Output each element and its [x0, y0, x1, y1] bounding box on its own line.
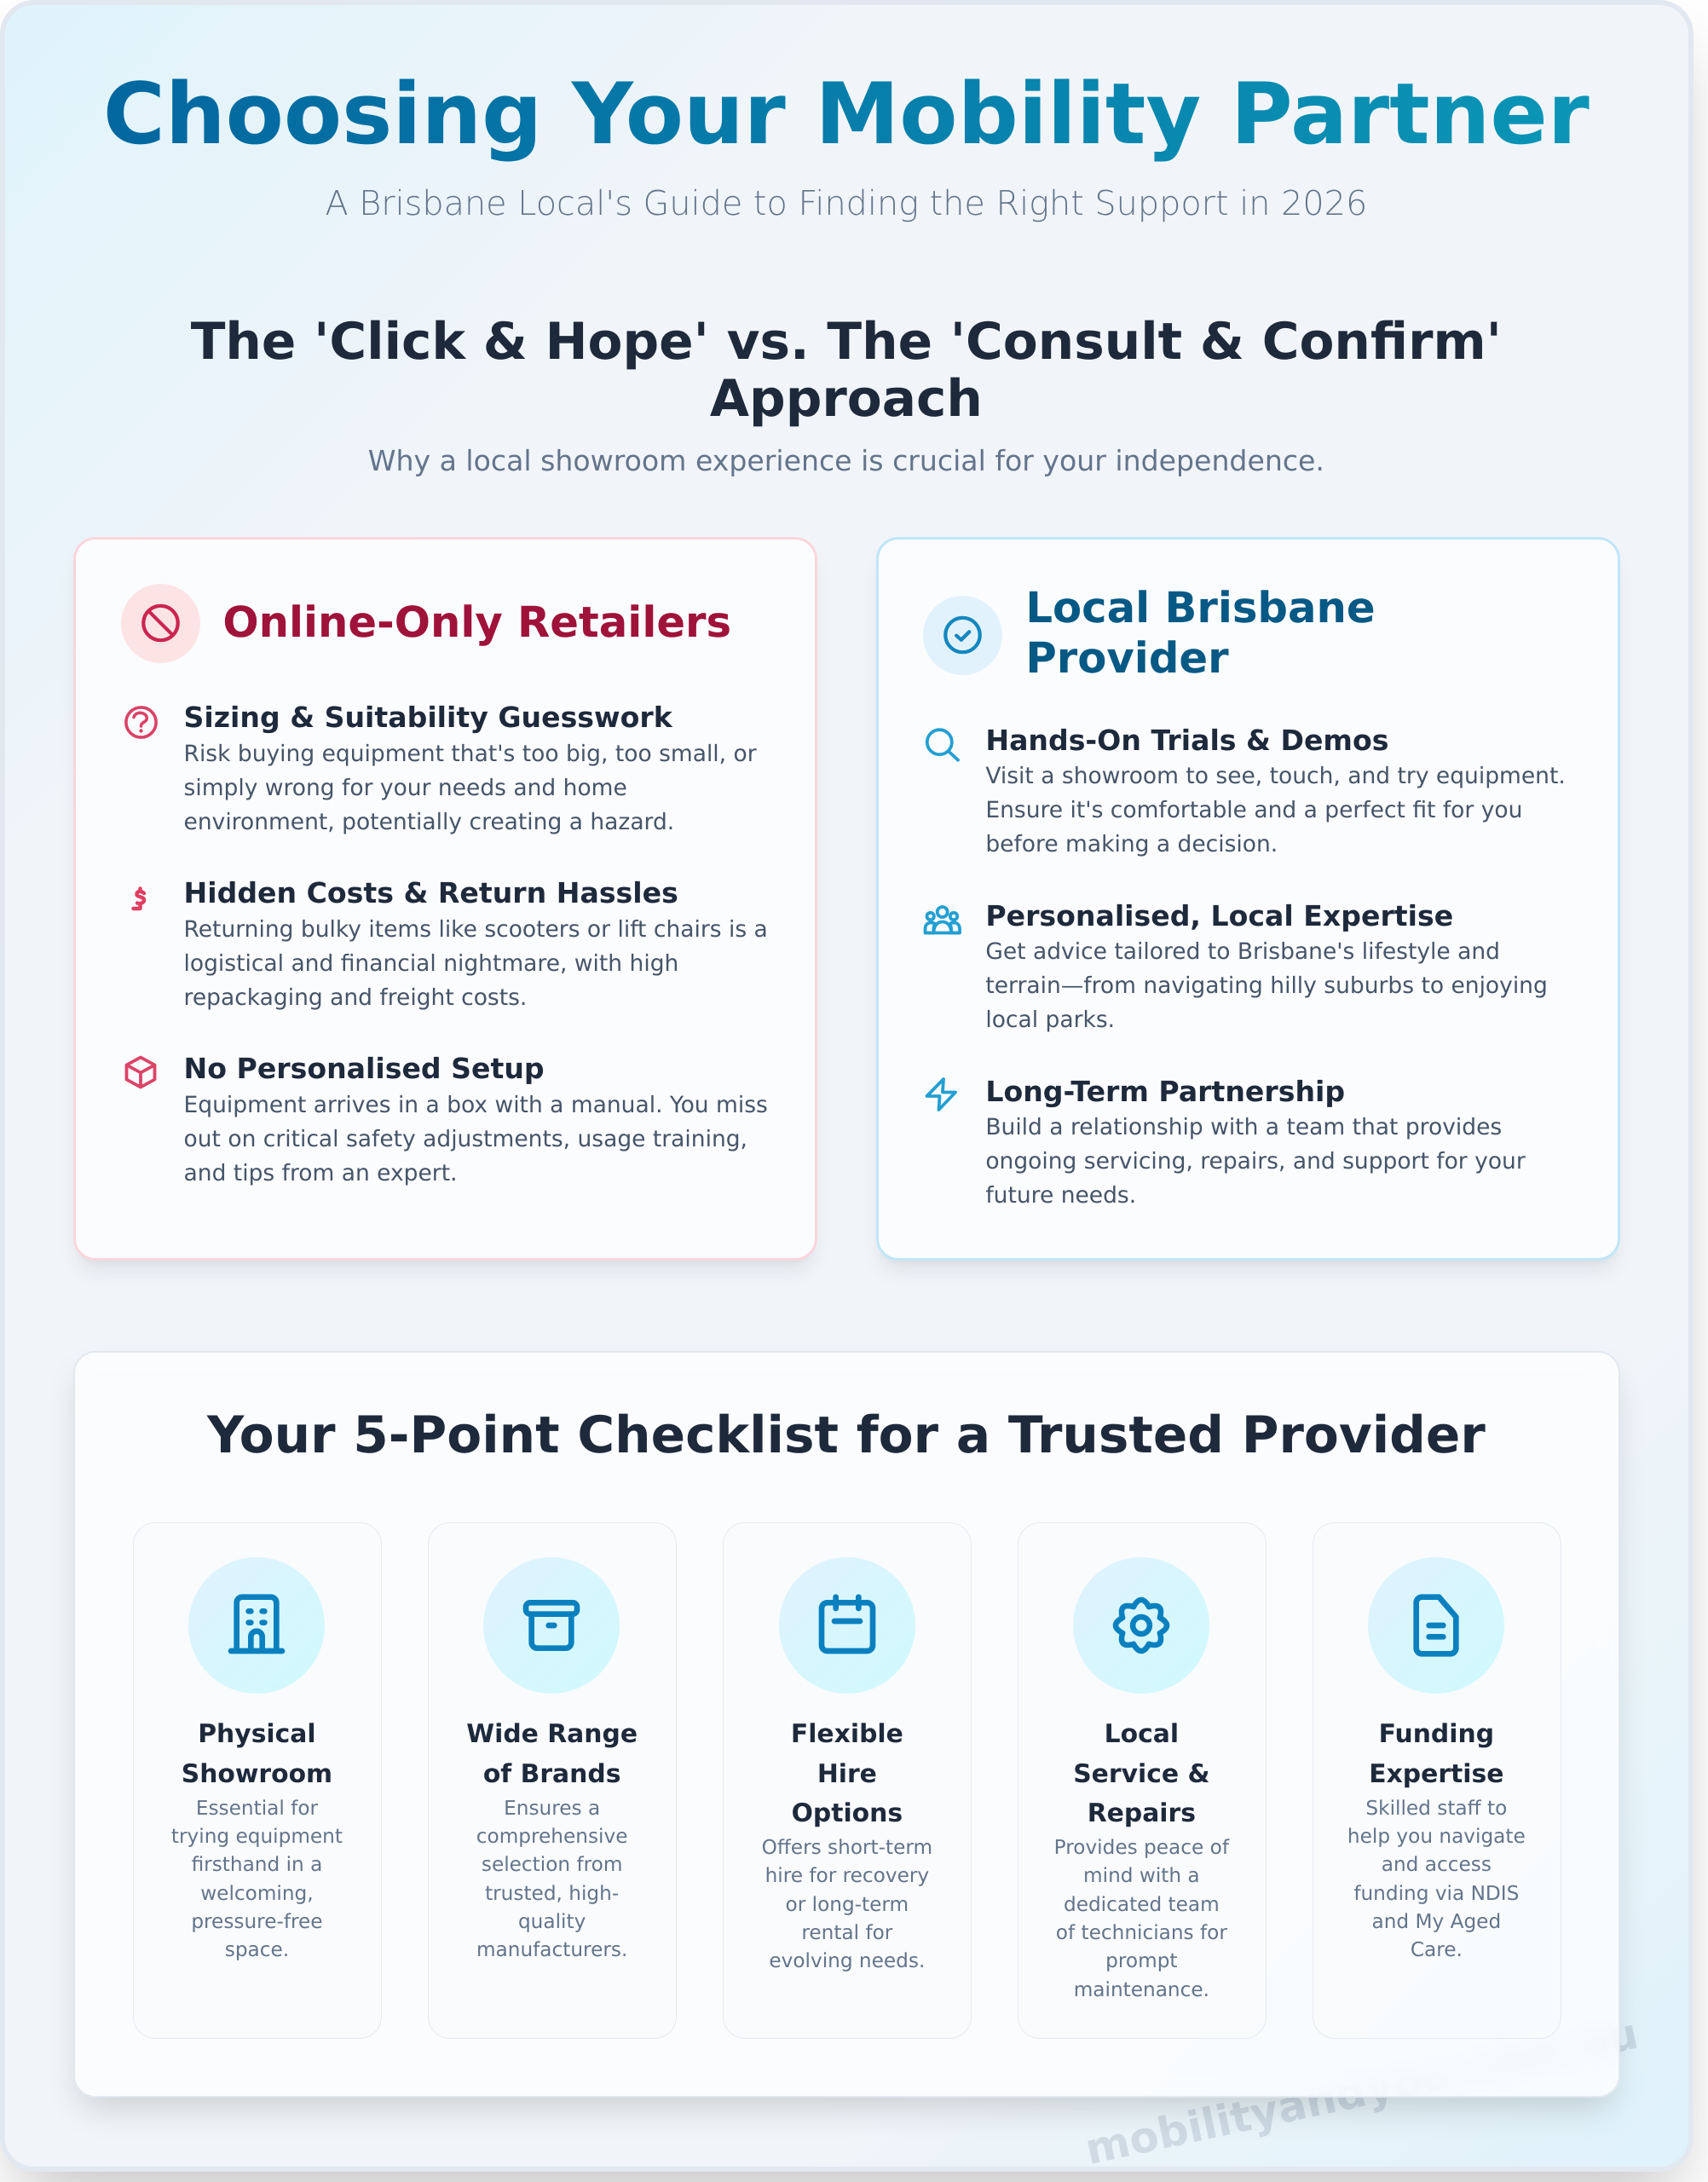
description: [762, 1836, 932, 1972]
item: local expertise text: [985, 938, 1548, 1033]
item: local expertise text: local parks.: [985, 1007, 1115, 1033]
description: funding via NDIS: [1353, 1882, 1519, 1905]
item: hands-on trials text: [985, 763, 1566, 857]
heading: local brisbane provider: [1025, 583, 1376, 683]
description: pressure-free: [191, 1910, 323, 1933]
item: hidden costs text: repackaging and freight costs.: [184, 984, 527, 1011]
title: Flexible: [791, 1719, 903, 1749]
item: hidden costs title: Hidden Costs & Return Hassles: [184, 876, 678, 909]
description: comprehensive: [476, 1825, 627, 1848]
item: sizing guesswork text: Risk buying equipment that's too big, too small, or: [184, 741, 757, 767]
description: Provides peace of: [1054, 1836, 1229, 1859]
title: of Brands: [483, 1759, 620, 1789]
panel: checklist: [73, 1351, 1620, 2098]
title: [466, 1719, 638, 1789]
description: help you navigate: [1347, 1825, 1526, 1848]
item: no setup text: Equipment arrives in a box with a manual. You miss: [184, 1092, 768, 1118]
card: funding expertise: [1313, 1522, 1561, 2039]
heading: local brisbane provider: Provider: [1025, 633, 1229, 683]
description: prompt: [1105, 1949, 1178, 1972]
item: local expertise title: Personalised, Local Expertise: [985, 899, 1453, 932]
item: no setup text: out on critical safety adjustments, usage training,: [184, 1126, 747, 1152]
description: hire for recovery: [765, 1864, 929, 1887]
item: hidden costs text: Returning bulky items like scooters or lift chairs is a: [184, 916, 768, 943]
icon: document: [1368, 1557, 1504, 1694]
item: long-term partnership text: future needs.: [985, 1182, 1136, 1209]
item: long-term partnership text: [985, 1114, 1526, 1209]
item: no setup text: and tips from an expert.: [184, 1160, 458, 1186]
item: hands-on trials text: Ensure it's comfortable and a perfect fit for you: [985, 797, 1522, 823]
item: sizing guesswork text: environment, potentially creating a hazard.: [184, 809, 674, 835]
card: physical showroom: [133, 1522, 382, 2039]
item: hands-on trials title: Hands-On Trials & Demos: [985, 724, 1388, 757]
icon: calendar: [779, 1557, 915, 1694]
item: no setup title: No Personalised Setup: [184, 1052, 545, 1085]
section heading: comparison: The 'Click & Hope' vs. The 'Consult & Confirm': [191, 313, 1502, 372]
description: space.: [225, 1938, 289, 1961]
description: manufacturers.: [476, 1938, 627, 1961]
description: Skilled staff to: [1365, 1797, 1507, 1820]
description: firsthand in a: [192, 1853, 322, 1876]
icon: building: [188, 1557, 325, 1694]
title: [182, 1719, 332, 1789]
icon: check in blue circle: [923, 596, 1002, 675]
item: local expertise text: terrain—from navigating hilly suburbs to enjoying: [985, 973, 1548, 999]
heading: local brisbane provider: Local Brisbane: [1025, 583, 1376, 632]
title: [1369, 1719, 1503, 1789]
description: rental for: [801, 1921, 892, 1944]
icon: gear: [1073, 1557, 1209, 1694]
icon: dollar: [131, 886, 147, 910]
description: trusted, high-: [485, 1882, 619, 1905]
section subheading: Why a local showroom experience is crucial for your independence.: [368, 444, 1324, 477]
description: welcoming,: [200, 1882, 314, 1905]
description: [1347, 1797, 1526, 1961]
description: Offers short-term: [762, 1836, 932, 1859]
description: [171, 1797, 343, 1961]
item: sizing guesswork text: simply wrong for your needs and home: [184, 775, 627, 801]
item: hidden costs text: [184, 916, 768, 1011]
icon: lightning bolt: [926, 1077, 957, 1111]
section heading: comparison: Approach: [710, 370, 983, 429]
icon: box: [124, 1055, 157, 1089]
title: Hire: [817, 1759, 877, 1789]
item: long-term partnership text: Build a relationship with a team that provides: [985, 1114, 1502, 1140]
description: Essential for: [196, 1797, 318, 1820]
checklist heading: Your 5-Point Checklist for a Trusted Provider: [207, 1406, 1486, 1465]
title: Physical: [198, 1719, 316, 1749]
title: Wide Range: [466, 1719, 638, 1749]
subtitle: A Brisbane Local's Guide to Finding the Right Support in 2026: [325, 184, 1367, 223]
description: dedicated team: [1064, 1893, 1220, 1916]
description: mind with a: [1083, 1864, 1200, 1887]
item: sizing guesswork text: [184, 741, 757, 835]
title: Showroom: [182, 1759, 332, 1789]
title: Choosing Your Mobility Partner: [103, 66, 1590, 164]
description: trying equipment: [171, 1825, 343, 1848]
item: hands-on trials text: Visit a showroom to see, touch, and try equipment.: [985, 763, 1566, 789]
item: hidden costs text: logistical and financial nightmare, with high: [184, 950, 678, 977]
description: Care.: [1411, 1938, 1463, 1961]
title: Repairs: [1088, 1798, 1196, 1828]
card: flexible hire options: [723, 1522, 972, 2039]
heading: online-only retailers: Online-Only Retailers: [222, 597, 731, 647]
title: Expertise: [1369, 1759, 1503, 1789]
icon: team: [924, 905, 961, 934]
description: and access: [1382, 1853, 1492, 1876]
description: Ensures a: [504, 1797, 600, 1820]
title: Options: [792, 1798, 903, 1828]
description: evolving needs.: [769, 1949, 925, 1972]
item: long-term partnership title: Long-Term Partnership: [985, 1075, 1345, 1108]
description: selection from: [482, 1853, 622, 1876]
description: of technicians for: [1056, 1921, 1227, 1944]
title: Local: [1105, 1719, 1179, 1749]
title: Funding: [1379, 1719, 1494, 1749]
description: maintenance.: [1074, 1978, 1209, 2001]
icon: ban in pink circle: [121, 584, 200, 663]
section heading: comparison: [191, 313, 1502, 429]
item: long-term partnership text: ongoing servicing, repairs, and support for your: [985, 1148, 1526, 1175]
icon: archive box: [483, 1557, 620, 1694]
description: [476, 1797, 627, 1961]
panel: local brisbane provider: [876, 537, 1620, 1261]
icon: search: [926, 728, 960, 762]
panel: online-only retailers: [73, 537, 817, 1261]
item: sizing guesswork title: Sizing & Suitability Guesswork: [184, 701, 672, 734]
card: wide range of brands: [428, 1522, 677, 2039]
title: [791, 1719, 903, 1828]
description: quality: [518, 1910, 586, 1933]
card: local service and repairs: [1018, 1522, 1267, 2039]
item: local expertise text: Get advice tailored to Brisbane's lifestyle and: [985, 938, 1500, 965]
description: [1054, 1836, 1229, 2001]
title: Service &: [1073, 1759, 1209, 1789]
description: or long-term: [786, 1893, 909, 1916]
title: [1073, 1719, 1209, 1828]
item: hands-on trials text: before making a decision.: [985, 831, 1278, 857]
watermark: mobilityandyou.com.au: [1082, 2009, 1642, 2174]
item: no setup text: [184, 1092, 768, 1186]
description: and My Aged: [1372, 1910, 1501, 1933]
icon: question circle: [124, 706, 158, 739]
